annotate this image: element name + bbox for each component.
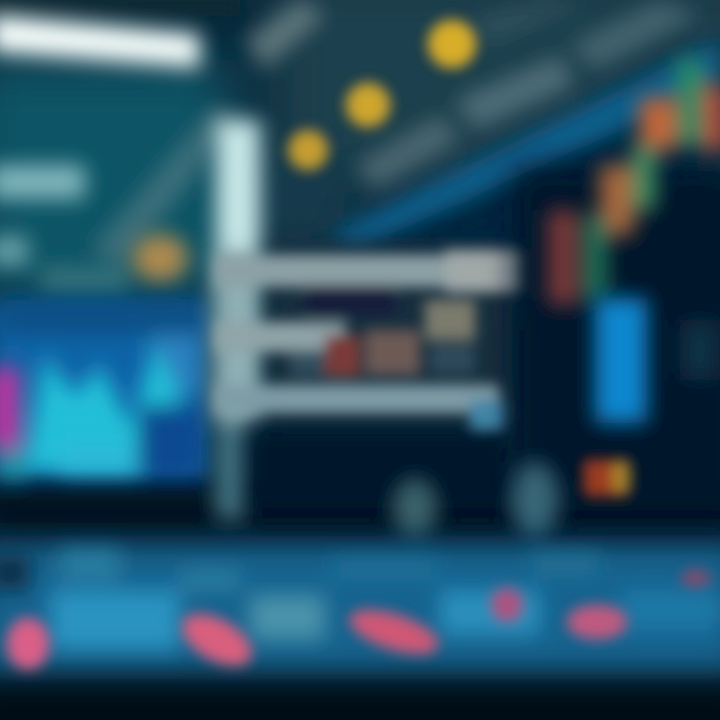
ceiling — [0, 0, 720, 300]
right dark section — [515, 170, 720, 520]
candlesticks — [548, 60, 720, 305]
blue vertical bar — [595, 298, 647, 423]
ceiling diagonal stripes — [90, 0, 720, 270]
ceiling top dark edge — [0, 0, 240, 16]
white column — [212, 120, 264, 520]
floor — [0, 545, 720, 676]
centre dark lower panel — [250, 430, 510, 515]
centre dark display — [268, 245, 513, 425]
orange glow — [132, 234, 188, 282]
dark band — [0, 492, 720, 532]
ceiling light bars — [0, 14, 200, 295]
grey shapes — [393, 320, 720, 538]
red orange blob — [584, 460, 630, 496]
yellow lights — [288, 20, 476, 170]
left blue screen panel — [0, 300, 205, 485]
bottom dark strip — [0, 686, 720, 720]
centre display rows — [215, 250, 525, 430]
pink blobs — [7, 570, 711, 676]
